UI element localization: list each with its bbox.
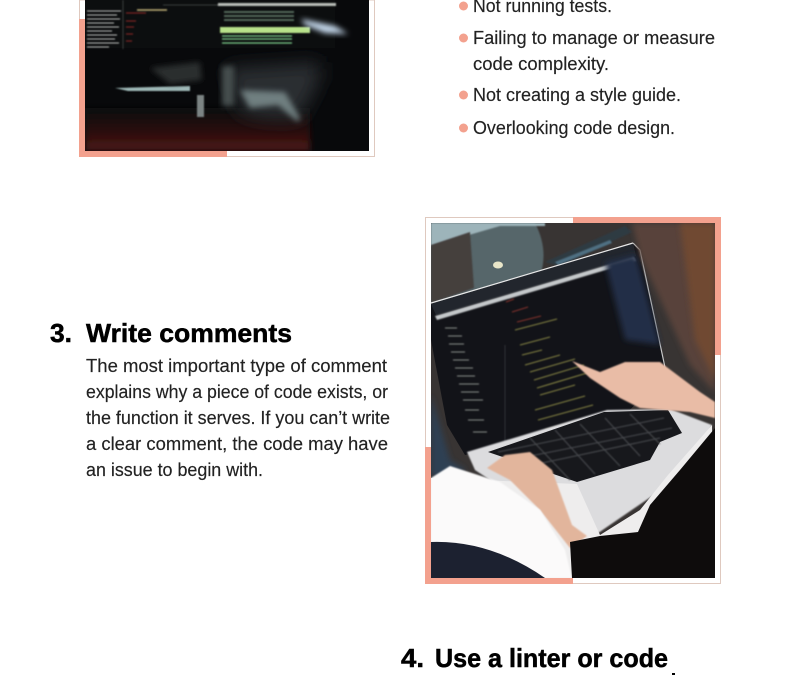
heading: 4. Use a linter or code: Use a linter or code: [435, 643, 668, 673]
bullet: style guide: Not creating a style guide.: [473, 85, 681, 105]
photo: hands pointing at code on a laptop: [431, 223, 715, 578]
bullet: code complexity: code complexity.: [473, 54, 609, 74]
white shirt: [431, 466, 572, 578]
table edge at the left: [431, 402, 465, 476]
text block: write comments description: a clear comment, the code may have: [86, 434, 388, 454]
person in dark clothing: [570, 428, 715, 578]
heading: 3. Write comments: Write comments: [86, 318, 292, 348]
text block: write comments description: explains why a piece of code exists, or: [86, 382, 388, 402]
clipped next heading line tip: [672, 673, 675, 675]
photo: dark monitors with terminal output: [85, 0, 369, 151]
typing hand: [487, 452, 587, 548]
heading: 3. Write comments: 3.: [50, 318, 72, 348]
heading: 4. Use a linter or code: 4.: [401, 643, 424, 673]
text block: write comments description: [86, 356, 390, 480]
pointing hand: [572, 361, 715, 418]
bullet: code design: Overlooking code design.: [473, 118, 675, 138]
bullet: code complexity: Failing to manage or measure: [473, 28, 715, 48]
bullet: code complexity: [459, 28, 715, 74]
text block: write comments description: The most important type of comment: [86, 356, 387, 376]
bullet list: common mistakes: [459, 0, 715, 138]
text block: write comments description: an issue to begin with.: [86, 460, 263, 480]
panel: laptop photo frame: [425, 217, 721, 584]
laptop screen: [431, 243, 667, 455]
laptop base: [467, 409, 712, 540]
text block: write comments description: the function it serves. If you can’t write: [86, 408, 390, 428]
code lines: [445, 299, 593, 455]
dark sleeve at bottom left: [431, 542, 545, 578]
glass table: [431, 223, 544, 303]
panel: top photo frame: [79, 0, 374, 157]
hair: [632, 223, 715, 392]
